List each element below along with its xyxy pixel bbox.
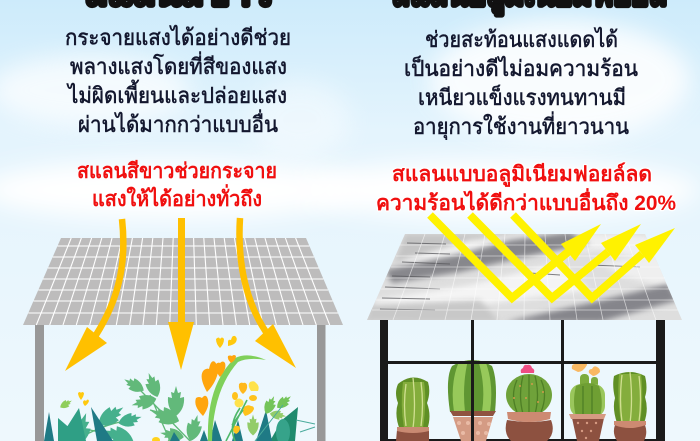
text block: white net description xyxy=(65,25,291,137)
sun arrow: left xyxy=(65,219,123,371)
cactus 5 in brown pot xyxy=(613,372,647,441)
text block: white net description: กระจายแสงได้อย่างดีช่วย xyxy=(65,25,291,50)
cactus 1 in brown pot xyxy=(396,377,430,441)
plants under white net xyxy=(44,336,315,441)
callout: white net benefit: สแลนสีขาวช่วยกระจาย xyxy=(77,159,277,183)
sun arrow: centre xyxy=(168,218,194,370)
sun arrow: right xyxy=(239,218,296,368)
white net greenhouse posts xyxy=(35,325,326,441)
cactus 2 in dotted pot xyxy=(448,360,496,441)
foil frame mullions and rail xyxy=(388,320,656,441)
text block: foil net description xyxy=(404,27,638,140)
text block: white net description: ไม่ผิดเพี้ยนและปล่อยแสง xyxy=(66,80,287,108)
text block: white net description: ผ่านได้มากกว่าแบบอื่น xyxy=(78,109,278,137)
callout: foil net benefit: สแลนแบบอลูมิเนียมฟอยล์ลด xyxy=(392,162,652,188)
cactus 3 with pink flower in brown pot xyxy=(506,365,553,441)
icon: small yellow hearts xyxy=(78,392,89,406)
text block: foil net description: เหนียวแข็งแรงทนทานมี xyxy=(418,83,626,110)
reflected arrow 3 xyxy=(513,215,675,298)
cactus 4 with orange flowers in dotted pot xyxy=(569,361,606,441)
reflected arrow 1 xyxy=(430,215,601,298)
text block: foil net description: อายุการใช้งานที่ยาวนาน xyxy=(413,111,629,140)
icon: green leaf xyxy=(58,397,74,411)
reflected sun arrows xyxy=(430,215,675,298)
text block: foil net description: ช่วยสะท้อนแสงแดดได้ xyxy=(425,27,618,52)
text block: foil net description: เป็นอย่างดีไม่อมความร้อน xyxy=(404,54,638,81)
text block: white net description: พลางแสงโดยที่สีของแสง xyxy=(70,51,287,79)
callout: foil net benefit xyxy=(376,162,676,215)
tall flower stem xyxy=(208,355,266,441)
callout: foil net benefit: ความร้อนได้ดีกว่าแบบอื่นถึง 20% xyxy=(376,187,676,215)
foil greenhouse frame xyxy=(380,320,665,441)
callout: white net benefit: แสงให้ได้อย่างทั่วถึง xyxy=(92,183,262,211)
white shade net roof xyxy=(23,238,343,325)
reflected arrow 2 xyxy=(470,215,641,298)
callout: white net benefit xyxy=(77,159,277,211)
icon: yellow hearts xyxy=(216,336,237,348)
aluminium foil net roof xyxy=(365,232,682,322)
icon: yellow flowers xyxy=(152,381,259,441)
